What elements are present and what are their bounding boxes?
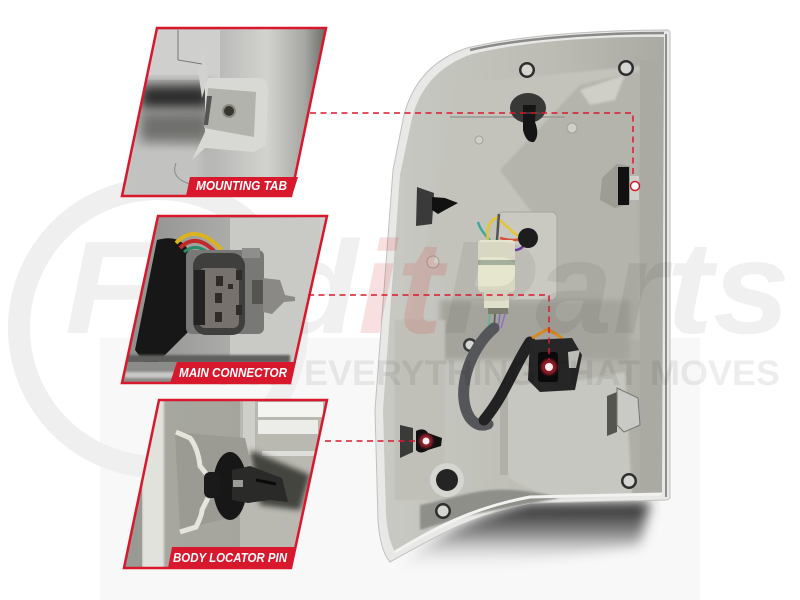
callout line: main connector <box>308 295 557 375</box>
lower bulge housing <box>502 372 632 498</box>
tab body <box>192 78 268 160</box>
wire bundle above connector <box>478 214 526 250</box>
harness grommet <box>518 228 538 248</box>
watermark brand: FinditParts <box>65 214 790 361</box>
wires <box>176 234 222 250</box>
inner plate <box>558 66 640 104</box>
horizontal ridge <box>450 116 565 118</box>
orange wires <box>532 329 562 338</box>
label: body locator pin: BODY LOCATOR PIN <box>173 550 288 565</box>
callout line: mounting tab <box>310 113 640 190</box>
grey sleeve cable <box>464 328 494 425</box>
keyhole grommet <box>510 93 546 142</box>
label: main connector: MAIN CONNECTOR <box>179 365 288 380</box>
diagonal shaded side <box>501 72 639 307</box>
lamp drop shadow <box>396 502 650 572</box>
upper body clip <box>416 187 458 226</box>
white bracket <box>176 432 208 476</box>
lamp lens outline <box>375 30 670 562</box>
square mount plate <box>497 212 557 300</box>
label: main connector <box>170 362 296 383</box>
black cable <box>135 238 189 362</box>
panel: mounting tab <box>120 26 330 198</box>
terminals <box>215 270 242 322</box>
main connector on lamp <box>528 338 582 392</box>
panel: body locator pin <box>120 398 330 570</box>
black sleeve cable <box>484 342 530 420</box>
lower body locator pin <box>400 425 442 458</box>
connector housing <box>186 250 264 334</box>
metal plate <box>204 88 256 137</box>
watermark logo text <box>65 214 790 393</box>
pin body <box>232 466 288 503</box>
watermark tagline: FOR EVERYTHING THAT MOVES <box>218 354 780 393</box>
small round posts <box>427 123 577 268</box>
white harness connector <box>478 240 515 314</box>
screw hole <box>222 104 236 118</box>
callout line: body locator pin <box>325 434 433 448</box>
connector latch <box>252 280 263 304</box>
wires under connector <box>488 314 505 328</box>
lamp housing <box>383 37 664 552</box>
shaded lower-left trim <box>420 490 560 530</box>
label: mounting tab: MOUNTING TAB <box>196 178 287 193</box>
upper lens dark edge <box>470 33 664 50</box>
panel: main connector <box>120 214 330 386</box>
bottom ledge <box>125 355 290 363</box>
panel frame <box>124 400 327 568</box>
panel frame <box>122 216 327 383</box>
watermark ring <box>19 189 297 467</box>
drain plug grommet <box>430 463 464 497</box>
lower clip <box>607 388 640 436</box>
tail lamp rear view <box>375 30 670 562</box>
plate <box>175 432 250 530</box>
panel frame <box>122 28 326 196</box>
faint background box <box>100 338 700 600</box>
vertical white trim <box>142 398 164 570</box>
label: body locator pin <box>168 547 296 568</box>
lower recessed shade <box>440 300 630 360</box>
dark cast shadow <box>250 450 310 510</box>
mounting tab on lamp <box>600 164 639 208</box>
pin flange <box>213 452 247 520</box>
mounting screws <box>435 60 637 519</box>
